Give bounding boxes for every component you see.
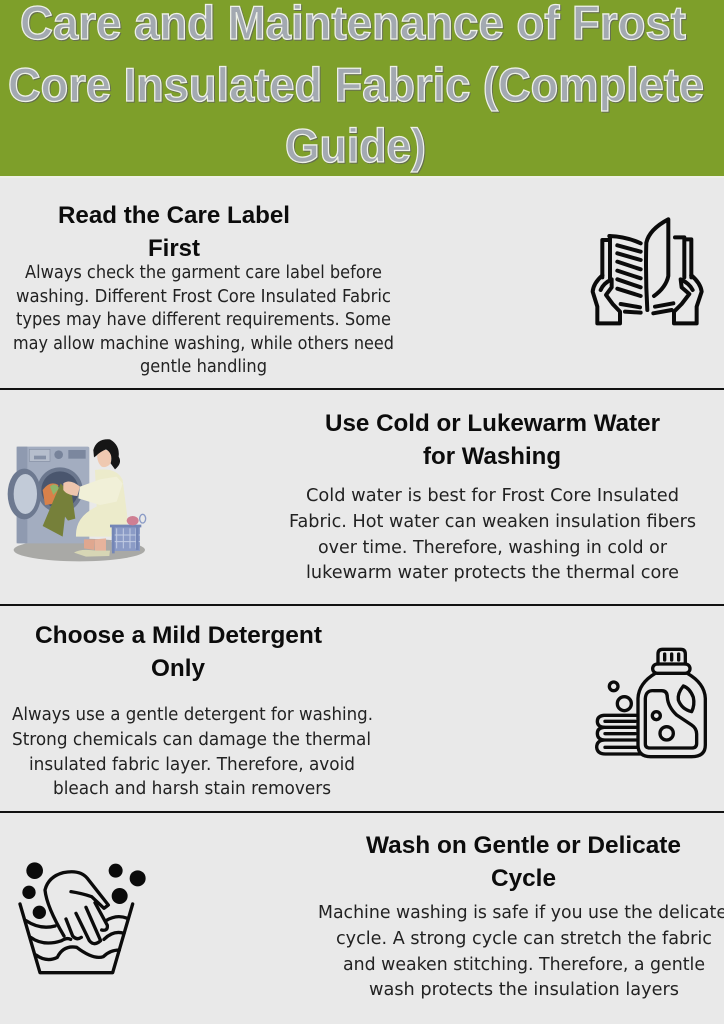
heading: mild detergent: Choose a Mild Detergent [35, 622, 322, 649]
heading: cold or lukewarm water: Use Cold or Lukewarm Water [325, 410, 660, 437]
title banner [0, 0, 724, 178]
heading: mild detergent: Only [151, 655, 206, 682]
text block: detergent [12, 705, 373, 799]
heading: cold or lukewarm water: for Washing [423, 443, 561, 470]
text block: cold water: Fabric. Hot water can weaken insulation fibers [289, 512, 696, 532]
heading: mild detergent [35, 622, 322, 682]
heading: gentle or delicate cycle [366, 832, 681, 892]
text block: detergent: bleach and harsh stain removers [53, 779, 331, 799]
icon: hands holding open book [593, 219, 702, 323]
text block: care label: may allow machine washing, while others need [13, 334, 394, 354]
panel: gentle or delicate cycle [0, 813, 724, 1024]
text block: delicate cycle: wash protects the insulation layers [369, 980, 679, 1000]
panel: mild detergent [0, 606, 724, 811]
heading: read the care label [58, 202, 290, 262]
panel: read the care label [0, 178, 724, 388]
heading: read the care label: First [148, 235, 200, 262]
heading: gentle or delicate cycle: Cycle [491, 865, 556, 892]
text block: delicate cycle: Machine washing is safe if you use the delicate [318, 903, 724, 923]
icon: hand washing basin [20, 862, 146, 973]
panel: cold or lukewarm water [0, 390, 724, 605]
text block: care label: washing. Different Frost Core Insulated Fabric [16, 287, 391, 307]
illustration: woman loading washing machine [8, 439, 146, 561]
text block: cold water: over time. Therefore, washing in cold or [318, 538, 668, 558]
heading: cold or lukewarm water [325, 410, 660, 470]
text block: care label: gentle handling [140, 357, 267, 377]
text block: delicate cycle [318, 903, 724, 1000]
divider line [0, 604, 724, 606]
icon: detergent bottle and folded towels [597, 649, 705, 757]
divider line [0, 388, 724, 390]
title: Core Insulated Fabric (Complete [9, 59, 705, 112]
title: Guide) [285, 119, 426, 172]
text block: cold water: lukewarm water protects the thermal core [306, 563, 679, 583]
text block: delicate cycle: and weaken stitching. Therefore, a gentle [343, 955, 705, 975]
text block: care label: Always check the garment care label before [25, 263, 382, 283]
text block: care label [13, 263, 394, 377]
title [8, 0, 705, 173]
text block: cold water: Cold water is best for Frost Core Insulated [306, 486, 679, 506]
text block: care label: types may have different requirements. Some [16, 310, 391, 330]
divider line [0, 811, 724, 813]
text block: delicate cycle: cycle. A strong cycle can stretch the fabric [336, 929, 712, 949]
text block: detergent: Always use a gentle detergent for washing. [12, 705, 373, 725]
text block: cold water [289, 486, 696, 583]
heading: gentle or delicate cycle: Wash on Gentle or Delicate [366, 832, 681, 859]
title: Core Insulated Fabric (Complete [8, 58, 704, 111]
title: Guide) [286, 120, 427, 173]
text block: detergent: insulated fabric layer. Therefore, avoid [29, 755, 355, 775]
heading: read the care label: Read the Care Label [58, 202, 290, 229]
text block: detergent: Strong chemicals can damage the thermal [12, 730, 371, 750]
